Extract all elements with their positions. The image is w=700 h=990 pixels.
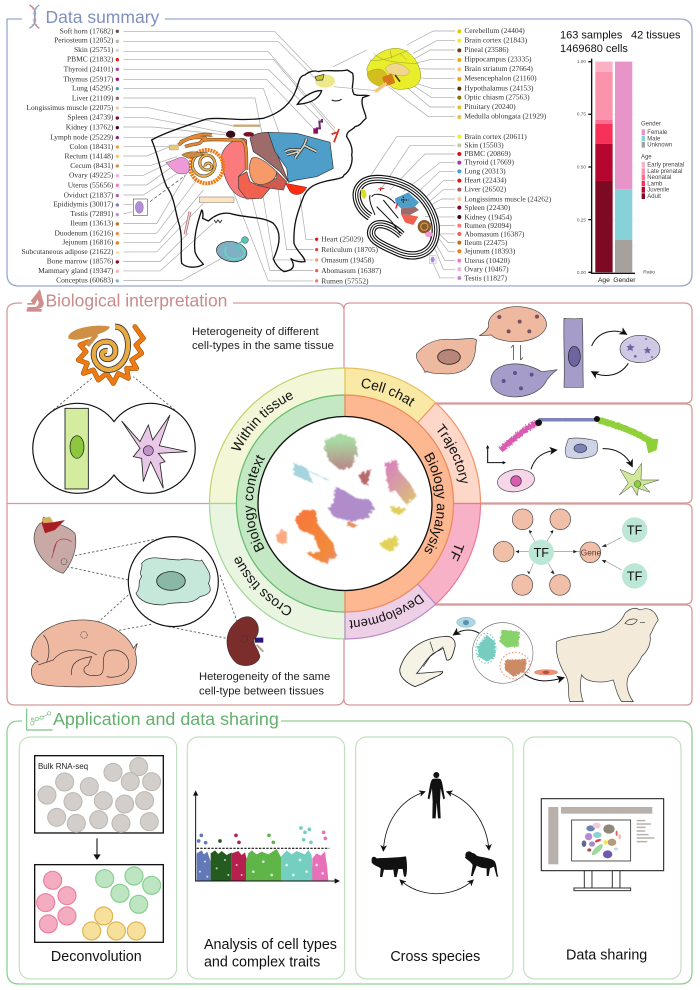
heading: biological interpretation: Biological interpretation — [46, 290, 227, 310]
organ: conceptus — [215, 237, 248, 264]
cell: elongated green — [65, 408, 88, 489]
labels: fetal tissues: Thyroid (17669) — [464, 158, 515, 167]
labels: brain regions: Pineal (23586) — [464, 45, 509, 54]
organ: lung — [268, 132, 333, 182]
cell: shared cell type — [136, 558, 210, 605]
labels: adult tissues: Subcutaneous adipose (21622) — [21, 247, 114, 256]
organ: kidney — [227, 617, 263, 666]
labels: fetal tissues: Spleen (22430) — [464, 203, 511, 212]
labels: fetal tissues: Heart (22434) — [464, 176, 507, 185]
panel: application and data sharing — [7, 708, 692, 984]
illustration: transcription factor network — [493, 509, 647, 595]
organ: uterus — [166, 158, 189, 174]
labels: adult tissues: Periosteum (12052) — [54, 36, 114, 45]
labels: brain regions: Cerebellum (24404) — [464, 26, 525, 35]
labels: fetal tissues: PBMC (20869) — [464, 149, 511, 158]
text: different cell types in tissue: Heterogeneity of different — [192, 326, 319, 338]
text: sample counts: 163 samples — [560, 30, 623, 42]
labels: fetal tissues: Ileum (22475) — [464, 238, 508, 247]
ring segment: biology analysis — [344, 394, 454, 613]
illustration: transcription factor network: TF — [534, 546, 549, 560]
legend: gender and age: Male — [647, 136, 661, 142]
labels: adult tissues: Spleen (24739) — [67, 113, 114, 122]
labels: adult tissues: Testis (72891) — [70, 209, 114, 218]
labels: fetal tissues: Liver (26502) — [464, 185, 507, 194]
labels: brain regions: Brain cortex (21843) — [464, 35, 528, 44]
organ: liver — [31, 620, 137, 687]
labels: brain regions: Mesencephalon (21160) — [464, 74, 537, 83]
text: same cell type between tissues: Heterogeneity of the same — [199, 671, 330, 683]
legend: gender and age: Gender — [641, 122, 661, 128]
legend: gender and age: Neonatal — [647, 175, 671, 181]
illustration: gut spiral with cells — [33, 326, 195, 493]
labels: brain regions: Hippocampus (23335) — [464, 55, 532, 64]
legend: gender and age: Age — [641, 154, 652, 160]
icon: microscope — [27, 289, 44, 312]
labels: ruminant stomach and heart: Abomasum (16387) — [321, 266, 382, 275]
labels: ruminant stomach and heart: Omasum (19458) — [321, 255, 374, 264]
organ: intestines — [178, 134, 247, 170]
legend: gender and age: Female — [647, 130, 668, 136]
labels: fetal tissues: Ovary (10467) — [464, 265, 509, 274]
labels: adult tissues: Thymus (25917) — [63, 74, 114, 83]
labels: adult tissues: PBMC (21832) — [67, 55, 114, 64]
chart: stacked ratio bars: Age — [598, 277, 610, 284]
labels: adult tissues: Oviduct (21837) — [64, 190, 114, 199]
labels: adult tissues: Longissimus muscle (22075) — [26, 103, 114, 112]
labels: adult tissues — [21, 26, 119, 285]
text: same cell type between tissues: cell-type between tissues — [199, 686, 324, 698]
labels: adult tissues: Skin (25751) — [74, 45, 114, 54]
labels: adult tissues: Ovary (49225) — [69, 171, 114, 180]
legend: gender and age: Juvenile — [647, 188, 670, 194]
illustration: development — [400, 608, 658, 702]
labels: ruminant stomach and heart: Heart (25029) — [321, 235, 364, 244]
ring segment: cross tissue — [208, 502, 346, 640]
card: cell types and complex traits: Analysis of cell types — [204, 937, 337, 953]
ring segment: trajectory — [418, 402, 482, 503]
labels: ruminant stomach and heart: Rumen (57552) — [321, 276, 369, 285]
labels: brain regions: Medulla oblongata (21929) — [464, 112, 547, 121]
ring segment: cell chat — [344, 367, 436, 422]
labels: fetal tissues: Rumen (92094) — [464, 221, 512, 230]
labels: fetal tissues: Skin (15503) — [464, 141, 504, 150]
card: deconvolution: Bulk RNA-seq — [38, 762, 88, 771]
legend: gender and age: Late prenatal — [647, 169, 682, 175]
icon: monitor with web portal — [541, 799, 664, 891]
labels: adult tissues: Conceptus (60683) — [56, 276, 114, 285]
labels: fetal tissues — [457, 132, 552, 282]
labels: fetal tissues: Testis (11827) — [464, 273, 507, 282]
labels: adult tissues: Ileum (13613) — [70, 219, 114, 228]
leader lines: brain and fetal labels — [333, 31, 455, 278]
illustration: transcription factor network: Gene — [581, 547, 602, 557]
chart: UMAP of cell clusters — [276, 433, 417, 563]
illustration: brain — [367, 48, 421, 92]
ring chart: biology context and analysis — [208, 367, 482, 640]
illustration: same cell across organs — [31, 517, 263, 687]
labels: adult tissues: Thyroid (24101) — [64, 64, 114, 73]
labels: adult tissues: Epididymis (30017) — [53, 200, 114, 209]
labels: fetal tissues: Uterus (10420) — [464, 256, 510, 265]
chart: stacked ratio bars: 0.00 — [577, 270, 586, 275]
ring segment: trajectory: Trajectory — [437, 423, 468, 484]
card: cell types and complex traits: and complex traits — [204, 954, 320, 970]
text: different cell types in tissue: cell-types in the same tissue — [192, 340, 334, 352]
labels: adult tissues: Cecum (8431) — [70, 161, 114, 170]
labels: brain regions: Hypothalamus (24153) — [464, 83, 534, 92]
labels: adult tissues: Mammary gland (19347) — [38, 266, 114, 275]
ring segment: biology context: Biology context — [246, 454, 265, 552]
organ: abomasum — [238, 172, 270, 199]
illustration: cell chat — [416, 307, 660, 397]
silhouette: human — [428, 772, 445, 818]
card: deconvolution — [19, 737, 177, 979]
ring segment: biology analysis: Biology analysis — [424, 452, 444, 554]
heading: application and data sharing: Application and data sharing — [53, 709, 279, 729]
labels: adult tissues: Rectum (14148) — [64, 151, 114, 160]
labels: brain regions: Brain striatum (27664) — [464, 64, 533, 73]
labels: ruminant stomach and heart: Reticulum (18705) — [321, 245, 379, 254]
illustration: fetus in uterus — [357, 179, 436, 264]
ring segment: TF — [418, 502, 482, 604]
labels: fetal tissues: Kidney (19454) — [464, 212, 512, 221]
card: cross species — [356, 737, 513, 979]
ring segment: within tissue: Within tissue — [230, 392, 293, 450]
labels: fetal tissues: Longissimus muscle (24262) — [464, 194, 552, 203]
labels: adult tissues: Bone marrow (18576) — [47, 257, 114, 266]
panel: biological interpretation — [6, 289, 693, 706]
organ: brain spot — [315, 74, 335, 88]
leader lines: adult sheep labels — [123, 32, 335, 281]
heading: data summary: Data summary — [46, 7, 160, 27]
illustration: adult sheep anatomy — [133, 70, 368, 272]
chart: stacked ratio bars: Gender — [613, 277, 636, 284]
labels: fetal tissues: Abomasum (16387) — [464, 229, 525, 238]
ring segment: development: Development — [349, 594, 424, 629]
text: sample counts: 42 tissues — [631, 30, 681, 42]
ring segment: within tissue — [208, 367, 346, 504]
icon: scatter growth chart — [27, 708, 53, 730]
labels: adult tissues: Lung (45295) — [72, 84, 114, 93]
labels: adult tissues: Soft horn (17682) — [60, 26, 114, 35]
card: data sharing — [524, 737, 681, 979]
ring segment: TF: TF — [451, 546, 464, 562]
illustration: transcription factor network: TF — [627, 524, 643, 538]
legend: gender and age: Adult — [647, 194, 661, 200]
card: cell types and complex traits — [187, 737, 345, 979]
ring segment: cell chat: Cell chat — [362, 378, 415, 407]
chart: stacked ratio bars: 0.25 — [577, 217, 586, 222]
ring segment: cross tissue: Cross tissue — [234, 556, 292, 616]
icon: DNA helix — [29, 5, 39, 28]
labels: ruminant stomach and heart — [315, 235, 382, 285]
chart: stacked ratio bars: 0.75 — [577, 112, 586, 117]
legend: gender and age: Lamb — [647, 181, 663, 187]
labels: adult tissues: Lymph node (25229) — [50, 132, 114, 141]
labels: fetal tissues: Jejunum (18393) — [464, 247, 516, 256]
labels: brain regions: Optic chiasm (27563) — [464, 92, 530, 101]
labels: adult tissues: Jejunum (16816) — [62, 237, 114, 246]
chart: stacked ratio bars — [577, 59, 684, 284]
legend: gender and age: Early prenatal — [647, 163, 684, 169]
chart: stacked ratio bars: 0.50 — [577, 165, 586, 170]
illustration: transcription factor network: TF — [627, 570, 643, 584]
labels: brain regions — [457, 26, 547, 121]
text: sample counts — [560, 30, 681, 55]
ring segment: development — [344, 584, 436, 640]
labels: fetal tissues: Brain cortex (20611) — [464, 132, 527, 141]
organ: rumen — [222, 139, 247, 198]
chart: stacked ratio bars: Ratio — [643, 269, 655, 275]
chart: stacked ratio bars: 1.00 — [577, 59, 586, 64]
labels: adult tissues: Liver (21109) — [72, 93, 114, 102]
labels: adult tissues: Uterus (55656) — [68, 180, 114, 189]
card: cross species: Cross species — [390, 949, 480, 965]
labels: fetal tissues: Lung (20313) — [464, 166, 506, 175]
labels: adult tissues: Colon (18431) — [69, 142, 114, 151]
silhouette: ram — [465, 851, 498, 877]
organ: heart — [34, 517, 76, 573]
illustration: trajectory — [486, 416, 659, 496]
organ: heart — [286, 183, 307, 195]
panel: data summary — [7, 5, 692, 286]
organ: adipose — [199, 197, 234, 203]
labels: adult tissues: Kidney (13762) — [66, 122, 114, 131]
card: data sharing: Data sharing — [566, 947, 647, 963]
cell: stellate purple — [122, 415, 187, 488]
legend: gender and age — [641, 122, 684, 200]
labels: brain regions: Pituitary (20240) — [464, 102, 516, 111]
card: deconvolution: Deconvolution — [51, 949, 142, 965]
text: sample counts: 1469680 cells — [560, 43, 628, 55]
labels: adult tissues: Duodenum (16216) — [54, 228, 114, 237]
silhouette: cow — [372, 856, 407, 877]
legend: gender and age: Unknown — [647, 143, 672, 149]
sheep: adult — [556, 608, 658, 702]
ring segment: biology context — [236, 394, 346, 613]
